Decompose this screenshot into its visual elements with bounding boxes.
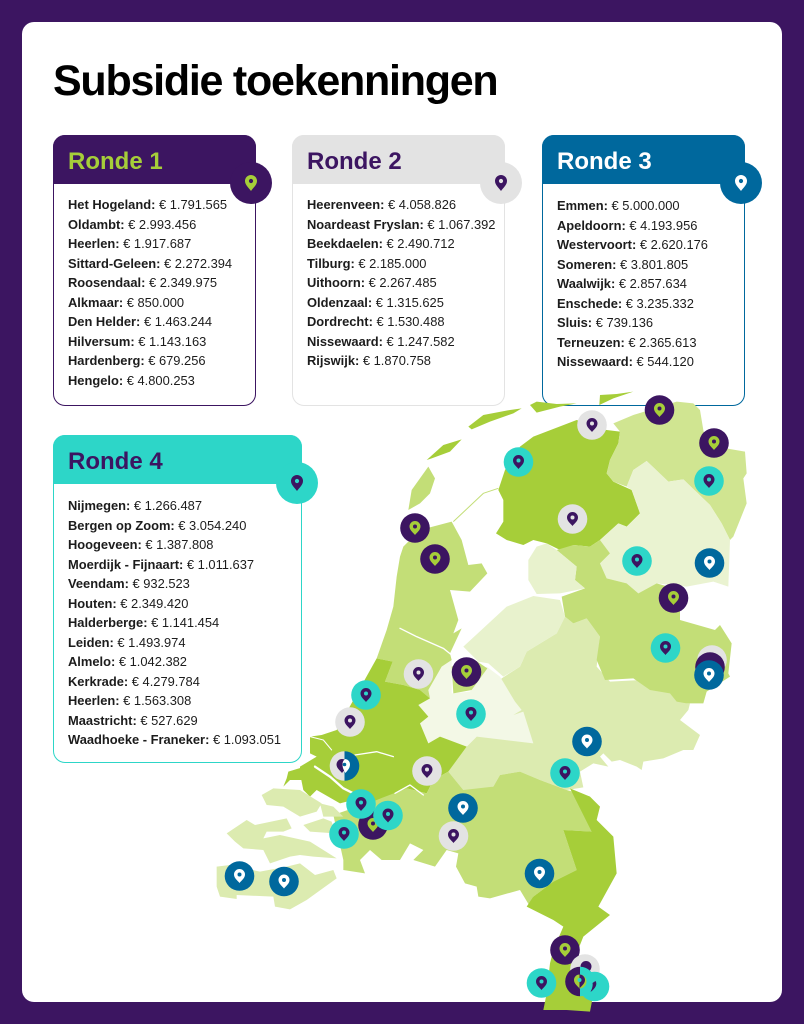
region: Zeeland (217, 788, 343, 909)
pin: Ronde 4 Nijmegen (550, 758, 580, 788)
pin: Ronde 2 Heerenveen (558, 504, 587, 534)
list: Ronde 1 amounts: Den Helder: € 1.463.244 (68, 314, 212, 329)
list: Ronde 3 amounts: Enschede: € 3.235.332 (557, 296, 694, 311)
region: Noord-Brabant (333, 772, 592, 907)
pin: Ronde 4 Houten (456, 699, 486, 729)
list: Ronde 3 amounts: Terneuzen: € 2.365.613 (557, 335, 696, 350)
pin: Ronde 1 Sittard-Geleen (550, 935, 580, 965)
pin: Ronde 1 Alkmaar (420, 544, 450, 574)
heading: Ronde 1: Ronde 1 (68, 148, 163, 175)
panel: Ronde 4 (53, 435, 302, 763)
region: Flevoland (463, 596, 565, 677)
icon: Ronde 1 badge (230, 162, 272, 204)
list: Ronde 4 amounts: Moerdijk - Fijnaart: € 1.011.637 (68, 556, 254, 572)
list: Ronde 4 amounts: Veendam: € 932.523 (68, 576, 190, 591)
pin: Ronde 1 Den Helder (400, 513, 430, 543)
Afsluitdijk (453, 488, 498, 522)
list: Ronde 3 amounts: Sluis: € 739.136 (557, 315, 653, 330)
list: Ronde 1 amounts: Alkmaar: € 850.000 (68, 295, 184, 310)
list: Ronde 1 amounts: Het Hogeland: € 1.791.565 (68, 197, 227, 212)
list: Ronde 3 amounts: Apeldoorn: € 4.193.956 (557, 218, 697, 233)
list: Ronde 1 amounts: Sittard-Geleen: € 2.272.394 (68, 256, 232, 271)
list: Ronde 2 amounts (307, 197, 495, 368)
pin: Ronde 4 Bergen op Zoom (329, 819, 359, 849)
pin: Nissewaard shared Ronde 2 and 3 (330, 751, 359, 781)
list: Ronde 4 amounts: Heerlen: € 1.563.308 (68, 693, 191, 708)
heading: Ronde 2: Ronde 2 (307, 148, 402, 175)
pin: Ronde 1 Hengelo (695, 652, 725, 682)
list: Ronde 4 amounts: Maastricht: € 527.629 (68, 712, 198, 728)
pin: Ronde 1 Het Hogeland (699, 428, 729, 458)
list: Ronde 4 amounts: Almelo: € 1.042.382 (68, 654, 187, 669)
region: Drenthe (600, 461, 730, 593)
region: Zuid-Holland (300, 658, 467, 805)
heading: Ronde 2 (292, 135, 505, 184)
list: Ronde 1 amounts: Hardenberg: € 679.256 (68, 353, 206, 368)
icon: Ronde 3 badge (720, 162, 762, 204)
list: Ronde 3 amounts (557, 198, 708, 369)
list: Ronde 2 amounts: Nissewaard: € 1.247.582 (307, 334, 455, 349)
pin: Ronde 3 Someren (525, 859, 554, 888)
list: Ronde 3 amounts: Emmen: € 5.000.000 (557, 198, 680, 213)
region: Utrecht (418, 660, 533, 747)
pin: Ronde 4 Veendam (694, 466, 724, 496)
list: Ronde 4 amounts: Hoogeveen: € 1.387.808 (68, 537, 213, 552)
pin: Ronde 3 Sluis (225, 861, 254, 891)
list: Ronde 4 amounts: Nijmegen: € 1.266.487 (68, 498, 202, 513)
list: Ronde 4 amounts: Houten: € 2.349.420 (68, 596, 188, 610)
panel: Ronde 2 (292, 135, 505, 406)
pin: Ronde 3 Emmen (695, 548, 724, 578)
icon: Ronde 4 badge (276, 462, 318, 504)
list: Ronde 3 amounts: Nissewaard: € 544.120 (557, 354, 694, 369)
list: Ronde 4 amounts: Halderberge: € 1.141.454 (68, 615, 219, 630)
pin cluster: Heerlen, Beekdaelen and Kerkrade (565, 954, 609, 1001)
list: Ronde 2 amounts: Dordrecht: € 1.530.488 (307, 314, 445, 329)
list: Ronde 2 amounts: Tilburg: € 2.185.000 (307, 256, 426, 271)
pin: Ronde 2 Rijswijk (335, 707, 365, 737)
pin: Ronde 4 Halderberge (373, 801, 403, 830)
list: Ronde 1 amounts: Heerlen: € 1.917.687 (68, 236, 191, 251)
region: Gelderland (448, 617, 700, 790)
pin: Ronde 4 Leiden (351, 680, 381, 710)
region: Gooi (452, 660, 487, 693)
list: Ronde 2 amounts: Oldenzaal: € 1.315.625 (307, 295, 444, 310)
pin: Ronde 4 Almelo (651, 633, 680, 663)
region: Noord-Holland (377, 522, 487, 698)
list: Ronde 4 amounts: Waadhoeke - Franeker: € 1.093.051 (68, 732, 281, 747)
list: Ronde 1 amounts: Roosendaal: € 2.349.975 (68, 275, 217, 290)
pin: Ronde 2 Tilburg (439, 821, 468, 851)
list: Ronde 3 amounts: Waalwijk: € 2.857.634 (557, 276, 687, 291)
region: Limburg (527, 788, 617, 1012)
list: Ronde 1 amounts (68, 197, 232, 388)
pins (225, 395, 729, 1001)
list: Ronde 2 amounts: Uithoorn: € 2.267.485 (307, 275, 437, 290)
pin: Ronde 1 Oldambt (645, 395, 674, 425)
list: Ronde 4 amounts: Leiden: € 1.493.974 (68, 634, 186, 650)
list: Ronde 4 amounts: Bergen op Zoom: € 3.054.240 (68, 518, 246, 532)
pin: Ronde 3 Waalwijk (448, 793, 478, 823)
region: Noordoostpolder (528, 543, 585, 594)
heading: Ronde 4 (53, 435, 302, 484)
pin: Ronde 2 Uithoorn (404, 659, 433, 689)
heading: Ronde 3 (542, 135, 745, 184)
pin: Ronde 4 Moerdijk - Fijnaart (346, 789, 376, 819)
panel: Ronde 3 (542, 135, 745, 406)
pin: Ronde 1 Roosendaal (358, 810, 388, 840)
panel: Ronde 1 (53, 135, 256, 406)
pin: Ronde 2 Noardeast Fryslan (577, 410, 607, 440)
pin: Ronde 3 Westervoort (572, 727, 602, 756)
pin: Ronde 2 Enschede area (697, 645, 727, 675)
list: Ronde 1 amounts: Oldambt: € 2.993.456 (68, 217, 196, 232)
list: Ronde 2 amounts: Rijswijk: € 1.870.758 (307, 353, 431, 368)
heading: Ronde 4: Ronde 4 (68, 448, 163, 475)
pin: Ronde 4 Maastricht (527, 968, 556, 998)
region: Groningen (607, 402, 747, 540)
rivers (310, 628, 452, 795)
list: Ronde 2 amounts: Beekdaelen: € 2.490.712 (307, 236, 455, 251)
list: Ronde 3 amounts: Someren: € 3.801.805 (557, 257, 688, 272)
pin: Ronde 1 Hardenberg (659, 583, 688, 613)
region: Friesland (496, 420, 640, 552)
provinces (217, 392, 747, 1012)
list: Ronde 2 amounts: Noardeast Fryslan: € 1.067.392 (307, 217, 495, 232)
pin: Ronde 3 Terneuzen (269, 867, 299, 896)
pin: Ronde 3 Enschede (694, 660, 724, 690)
list: Ronde 1 amounts: Hilversum: € 1.143.163 (68, 334, 206, 349)
pin: Ronde 2 Dordrecht (412, 756, 442, 786)
region: Overijssel (557, 540, 732, 703)
title: Subsidie toekenningen (53, 57, 497, 105)
heading: Ronde 3: Ronde 3 (557, 148, 652, 175)
list: Ronde 3 amounts: Westervoort: € 2.620.176 (557, 237, 708, 252)
region: Wadden islands (408, 392, 633, 510)
pin: Ronde 1 Hilversum (452, 657, 481, 687)
list: Ronde 1 amounts: Hengelo: € 4.800.253 (68, 373, 195, 388)
icon: Ronde 2 badge (480, 162, 522, 204)
pin: Ronde 4 Hoogeveen (622, 546, 652, 576)
region: Goeree-Overflakkee (283, 765, 377, 800)
list: Ronde 2 amounts: Heerenveen: € 4.058.826 (307, 197, 456, 212)
pin: Ronde 4 Waadhoeke - Franeker (504, 447, 533, 477)
list: Ronde 4 amounts: Kerkrade: € 4.279.784 (68, 674, 200, 688)
heading: Ronde 1 (53, 135, 256, 184)
list: Ronde 4 amounts (68, 498, 281, 747)
